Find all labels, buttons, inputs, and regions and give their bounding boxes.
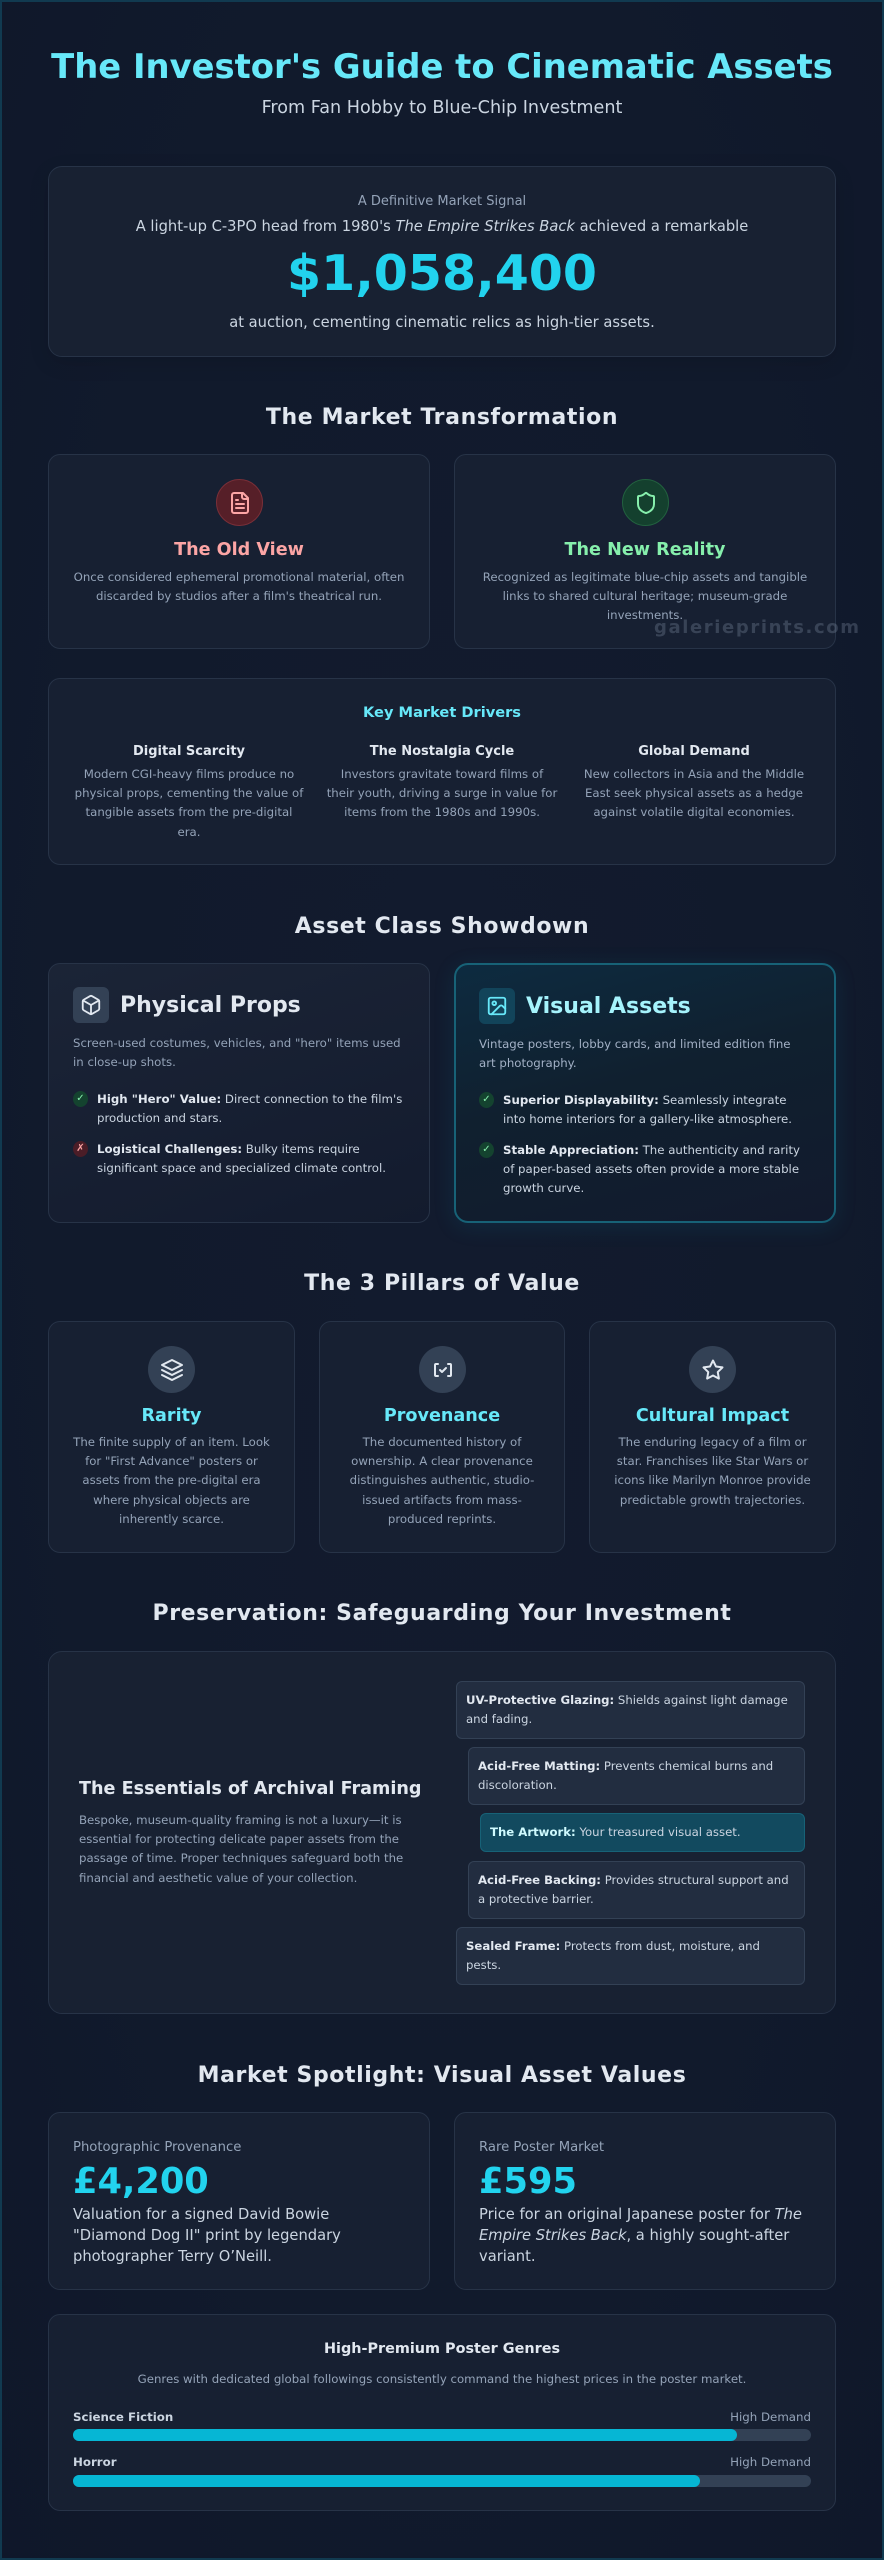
watermark: galerieprints.com bbox=[654, 617, 861, 638]
layer: acid-free backing: Acid-Free Backing: Provides structural support and bbox=[478, 1873, 789, 1887]
new reality text: links to shared cultural heritage; museum-grade bbox=[503, 589, 787, 603]
visual assets description: art photography. bbox=[479, 1056, 577, 1070]
hero closing text: at auction, cementing cinematic relics as high-tier assets. bbox=[229, 314, 655, 331]
driver: digital scarcity bbox=[75, 744, 304, 839]
value: £595 bbox=[479, 2161, 577, 2202]
old view text bbox=[74, 570, 404, 603]
heading: three pillars: The 3 Pillars of Value bbox=[304, 1271, 580, 1296]
driver: digital scarcity: era. bbox=[178, 825, 200, 839]
rarity text bbox=[73, 1435, 270, 1526]
layer: sealed frame bbox=[456, 1927, 805, 1985]
layer: sealed frame: Sealed Frame: Protects from dust, moisture, and bbox=[466, 1939, 760, 1953]
panel: archival framing bbox=[48, 1651, 836, 2014]
archival framing heading: The Essentials of Archival Framing bbox=[79, 1779, 422, 1799]
heading: market transformation: The Market Transformation bbox=[266, 405, 618, 430]
panel: provenance bbox=[319, 1321, 565, 1553]
rarity text: inherently scarce. bbox=[119, 1512, 224, 1526]
bar value: science fiction: High Demand bbox=[730, 2410, 811, 2424]
layer: sealed frame: pests. bbox=[466, 1958, 501, 1972]
provenance text bbox=[350, 1435, 534, 1526]
layer: acid-free backing bbox=[468, 1861, 805, 1919]
physical props description: Screen-used costumes, vehicles, and "hero" items used bbox=[73, 1036, 401, 1050]
heading: market spotlight: Market Spotlight: Visual Asset Values bbox=[198, 2063, 686, 2088]
archival framing text: Bespoke, museum-quality framing is not a luxury—it is bbox=[79, 1813, 402, 1827]
provenance title: Provenance bbox=[384, 1406, 500, 1426]
pro item: High "Hero" Value: Direct connection to the film's bbox=[97, 1092, 402, 1106]
title: The Investor's Guide to Cinematic Assets bbox=[51, 47, 833, 86]
description: Empire Strikes Back, a highly sought-after bbox=[479, 2227, 789, 2244]
pro item: of paper-based assets often provide a more stable bbox=[503, 1162, 799, 1176]
pro item bbox=[97, 1092, 402, 1125]
layer: uv glazing: UV-Protective Glazing: Shields against light damage bbox=[466, 1693, 788, 1707]
icon: verified scan bbox=[419, 1346, 466, 1393]
con item bbox=[97, 1142, 386, 1175]
rarity title: Rarity bbox=[141, 1406, 202, 1426]
rarity text: The finite supply of an item. Look bbox=[73, 1435, 270, 1449]
provenance text: ownership. A clear provenance bbox=[351, 1454, 533, 1468]
driver: nostalgia cycle: their youth, driving a surge in value for bbox=[327, 786, 557, 800]
driver: digital scarcity: tangible assets from the pre-digital bbox=[86, 805, 292, 819]
driver: global demand: East seek physical assets as a hedge bbox=[585, 786, 803, 800]
driver: global demand bbox=[584, 744, 804, 819]
layer: the artwork: The Artwork: Your treasured visual asset. bbox=[490, 1825, 741, 1839]
cultural impact text: predictable growth trajectories. bbox=[620, 1493, 805, 1507]
heading: asset class showdown: Asset Class Showdown bbox=[295, 914, 589, 939]
con marker: ✗ bbox=[76, 1143, 85, 1154]
old view text: Once considered ephemeral promotional material, often bbox=[74, 570, 404, 584]
layer: the artwork bbox=[480, 1813, 805, 1852]
icon: image bbox=[479, 988, 515, 1024]
label: Photographic Provenance bbox=[73, 2140, 241, 2155]
panel: cultural impact bbox=[589, 1321, 836, 1553]
archival framing text: essential for protecting delicate paper assets from the bbox=[79, 1832, 399, 1846]
old view text: discarded by studios after a film's theatrical run. bbox=[96, 589, 382, 603]
panel: physical props bbox=[48, 963, 430, 1223]
cultural impact title: Cultural Impact bbox=[636, 1406, 789, 1426]
cultural impact text bbox=[614, 1435, 811, 1507]
genres heading: High-Premium Poster Genres bbox=[324, 2341, 560, 2357]
pro item: into home interiors for a gallery-like atmosphere. bbox=[503, 1112, 792, 1126]
pro item bbox=[503, 1093, 792, 1126]
panel: the old view bbox=[48, 454, 430, 649]
new reality title: The New Reality bbox=[565, 540, 725, 560]
driver: global demand: against volatile digital economies. bbox=[593, 805, 795, 819]
bar value: horror: High Demand bbox=[730, 2455, 811, 2469]
genres note: Genres with dedicated global followings consistently command the highest prices in the poster market. bbox=[138, 2372, 746, 2386]
driver: digital scarcity: Digital Scarcity bbox=[133, 744, 245, 759]
panel: the new reality bbox=[454, 454, 836, 649]
pro item: growth curve. bbox=[503, 1181, 584, 1195]
archival framing text bbox=[79, 1813, 403, 1885]
old view title: The Old View bbox=[174, 540, 304, 560]
bar label: science fiction: Science Fiction bbox=[73, 2410, 173, 2424]
visual assets description: Vintage posters, lobby cards, and limited edition fine bbox=[479, 1037, 791, 1051]
bar: science fiction bbox=[73, 2429, 811, 2441]
pro marker bbox=[479, 1092, 494, 1108]
pro item: Stable Appreciation: The authenticity and rarity bbox=[503, 1143, 800, 1157]
value: £4,200 bbox=[73, 2161, 209, 2202]
label: Rare Poster Market bbox=[479, 2140, 604, 2155]
hero label: A Definitive Market Signal bbox=[358, 194, 526, 209]
pro item: Superior Displayability: Seamlessly integrate bbox=[503, 1093, 786, 1107]
physical props title: Physical Props bbox=[120, 993, 301, 1018]
driver: nostalgia cycle: items from the 1980s and 1990s. bbox=[344, 805, 540, 819]
new reality text: investments. bbox=[607, 608, 683, 622]
driver: nostalgia cycle: Investors gravitate toward films of bbox=[341, 767, 543, 781]
description bbox=[73, 2206, 341, 2265]
pro marker bbox=[73, 1091, 88, 1107]
pro item bbox=[503, 1143, 800, 1195]
description bbox=[479, 2206, 802, 2265]
panel: visual assets bbox=[454, 963, 836, 1223]
driver: nostalgia cycle bbox=[327, 744, 558, 819]
driver: digital scarcity: Modern CGI-heavy films produce no bbox=[84, 767, 294, 781]
icon: document bbox=[216, 479, 263, 526]
rarity text: assets from the pre-digital era bbox=[82, 1473, 261, 1487]
new reality text bbox=[483, 570, 807, 622]
heading: preservation: Preservation: Safeguarding Your Investment bbox=[152, 1601, 732, 1626]
cultural impact text: icons like Marilyn Monroe provide bbox=[614, 1473, 811, 1487]
panel: rarity bbox=[48, 1321, 295, 1553]
new reality text: Recognized as legitimate blue-chip assets and tangible bbox=[483, 570, 807, 584]
icon: shield bbox=[622, 479, 669, 526]
pro item: production and stars. bbox=[97, 1111, 222, 1125]
panel: poster genres bbox=[48, 2314, 836, 2511]
archival framing text: financial and aesthetic value of your collection. bbox=[79, 1871, 357, 1885]
drivers heading: Key Market Drivers bbox=[363, 704, 521, 721]
description: Valuation for a signed David Bowie bbox=[73, 2206, 329, 2223]
cultural impact text: star. Franchises like Star Wars or bbox=[617, 1454, 808, 1468]
physical props description: in close-up shots. bbox=[73, 1055, 176, 1069]
rarity text: where physical objects are bbox=[93, 1493, 250, 1507]
hero intro text: A light-up C-3PO head from 1980's The Empire Strikes Back achieved a remarkable bbox=[136, 218, 748, 235]
panel: key market drivers bbox=[48, 678, 836, 865]
icon: layers bbox=[148, 1346, 195, 1393]
pro marker: ✓ bbox=[482, 1094, 491, 1105]
rarity text: for "First Advance" posters or bbox=[85, 1454, 258, 1468]
con item: Logistical Challenges: Bulky items require bbox=[97, 1142, 360, 1156]
layer: uv glazing: and fading. bbox=[466, 1712, 532, 1726]
archival framing text: passage of time. Proper techniques safeguard both the bbox=[79, 1851, 403, 1865]
provenance text: produced reprints. bbox=[388, 1512, 496, 1526]
driver: nostalgia cycle: The Nostalgia Cycle bbox=[370, 744, 514, 759]
driver: digital scarcity: physical props, cementing the value of bbox=[75, 786, 303, 800]
description: variant. bbox=[479, 2248, 536, 2265]
pro marker bbox=[479, 1142, 494, 1158]
panel: rare poster market bbox=[454, 2112, 836, 2290]
provenance text: issued artifacts from mass- bbox=[362, 1493, 522, 1507]
description: "Diamond Dog II" print by legendary bbox=[73, 2227, 341, 2244]
visual assets description bbox=[479, 1037, 791, 1070]
bar: horror bbox=[73, 2475, 811, 2487]
subtitle: From Fan Hobby to Blue-Chip Investment bbox=[262, 98, 622, 118]
icon: star bbox=[689, 1346, 736, 1393]
pro marker: ✓ bbox=[76, 1093, 85, 1104]
layer: acid-free matting: discoloration. bbox=[478, 1778, 557, 1792]
description: photographer Terry O’Neill. bbox=[73, 2248, 272, 2265]
con marker bbox=[73, 1141, 88, 1157]
hero value: $1,058,400 bbox=[287, 245, 597, 302]
driver: global demand: Global Demand bbox=[638, 744, 750, 759]
bar label: horror: Horror bbox=[73, 2455, 117, 2469]
layer: uv glazing bbox=[456, 1681, 805, 1739]
con item: significant space and specialized climate control. bbox=[97, 1161, 386, 1175]
panel: market signal hero bbox=[48, 166, 836, 357]
provenance text: distinguishes authentic, studio- bbox=[350, 1473, 534, 1487]
physical props description bbox=[73, 1036, 401, 1069]
description: Price for an original Japanese poster for The bbox=[479, 2206, 802, 2223]
panel: photographic provenance bbox=[48, 2112, 430, 2290]
icon: box bbox=[73, 987, 109, 1023]
layer: acid-free matting: Acid-Free Matting: Prevents chemical burns and bbox=[478, 1759, 773, 1773]
driver: global demand: New collectors in Asia and the Middle bbox=[584, 767, 804, 781]
layer: acid-free backing: a protective barrier. bbox=[478, 1892, 594, 1906]
provenance text: The documented history of bbox=[363, 1435, 521, 1449]
cultural impact text: The enduring legacy of a film or bbox=[618, 1435, 807, 1449]
layer: acid-free matting bbox=[468, 1747, 805, 1805]
pro marker: ✓ bbox=[482, 1144, 491, 1155]
visual assets title: Visual Assets bbox=[526, 994, 691, 1019]
